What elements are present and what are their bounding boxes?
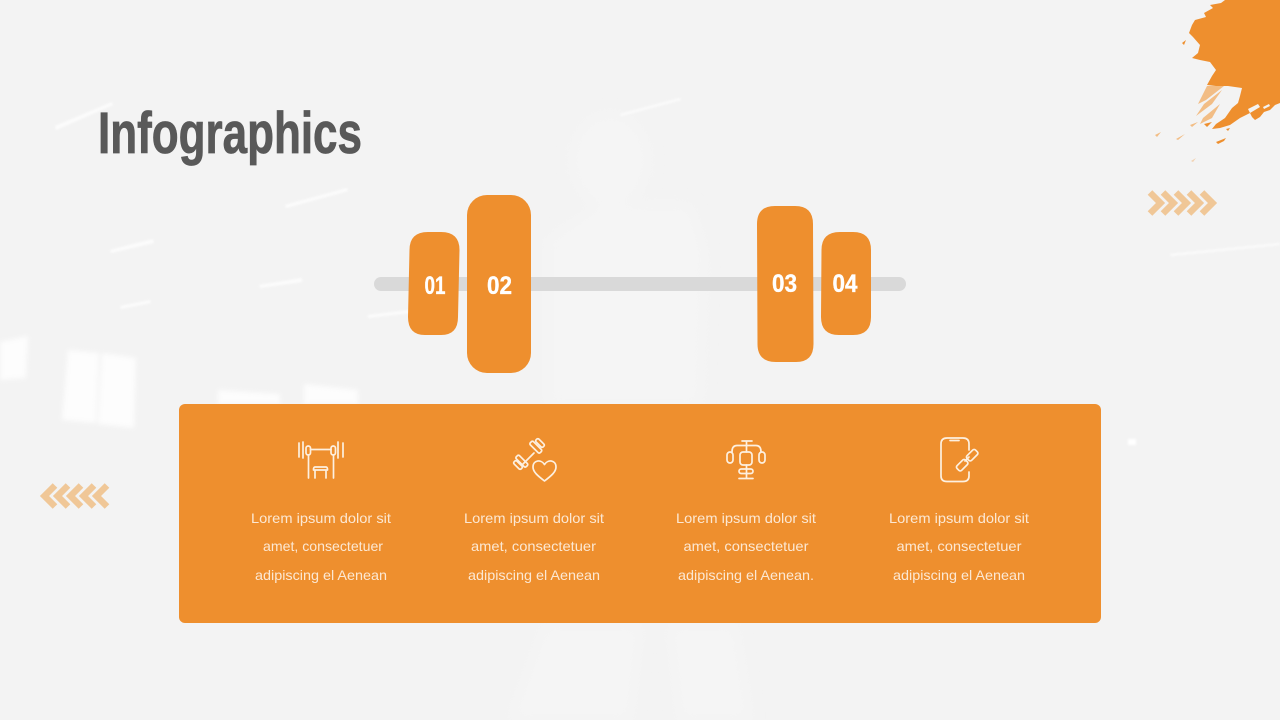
plate 03: 03: [772, 270, 797, 298]
plate 04: 04: [832, 270, 858, 298]
orange paint splash: [1155, 0, 1280, 162]
text block 2: Lorem ipsum dolor sit: [464, 510, 604, 526]
text block 4: [889, 510, 1029, 583]
column 1: [251, 442, 391, 583]
column 3: [676, 441, 816, 583]
text block 1: adipiscing el Aenean: [255, 567, 387, 583]
title: Infographics: [98, 101, 362, 166]
text block 3: Lorem ipsum dolor sit: [676, 510, 816, 526]
icon: phone with dumbbell: [941, 438, 979, 482]
text block 3: amet, consectetuer: [684, 538, 809, 554]
plate 03: [757, 206, 814, 362]
text block 4: adipiscing el Aenean: [893, 567, 1025, 583]
left chevrons: [44, 486, 107, 506]
icon: bench press: [299, 442, 343, 478]
right chevrons: [1150, 192, 1212, 214]
text block 4: amet, consectetuer: [896, 538, 1022, 554]
icon: dumbbell and heart: [513, 438, 556, 481]
text block 2: adipiscing el Aenean: [468, 567, 600, 583]
text block 1: Lorem ipsum dolor sit: [251, 510, 391, 526]
column 2: [464, 438, 604, 583]
plate 02: [467, 195, 531, 373]
text block 1: amet, consectetuer: [263, 538, 383, 554]
barbell chart: [374, 195, 906, 373]
column 4: [889, 438, 1029, 583]
splash streaks: [1216, 88, 1270, 113]
text block 2: amet, consectetuer: [471, 538, 596, 554]
plate 01: 01: [424, 272, 446, 300]
icon: gym machine: [727, 441, 765, 478]
plate 02: 02: [487, 272, 512, 300]
barbell bar: [374, 277, 906, 291]
text block 2: [464, 510, 604, 583]
plate 01: [408, 232, 460, 335]
plate 04: [821, 232, 871, 335]
text block 3: adipiscing el Aenean.: [678, 567, 814, 583]
orange info panel: [179, 404, 1101, 623]
text block 3: [676, 510, 816, 583]
text block 1: [251, 510, 391, 583]
text block 4: Lorem ipsum dolor sit: [889, 510, 1029, 526]
